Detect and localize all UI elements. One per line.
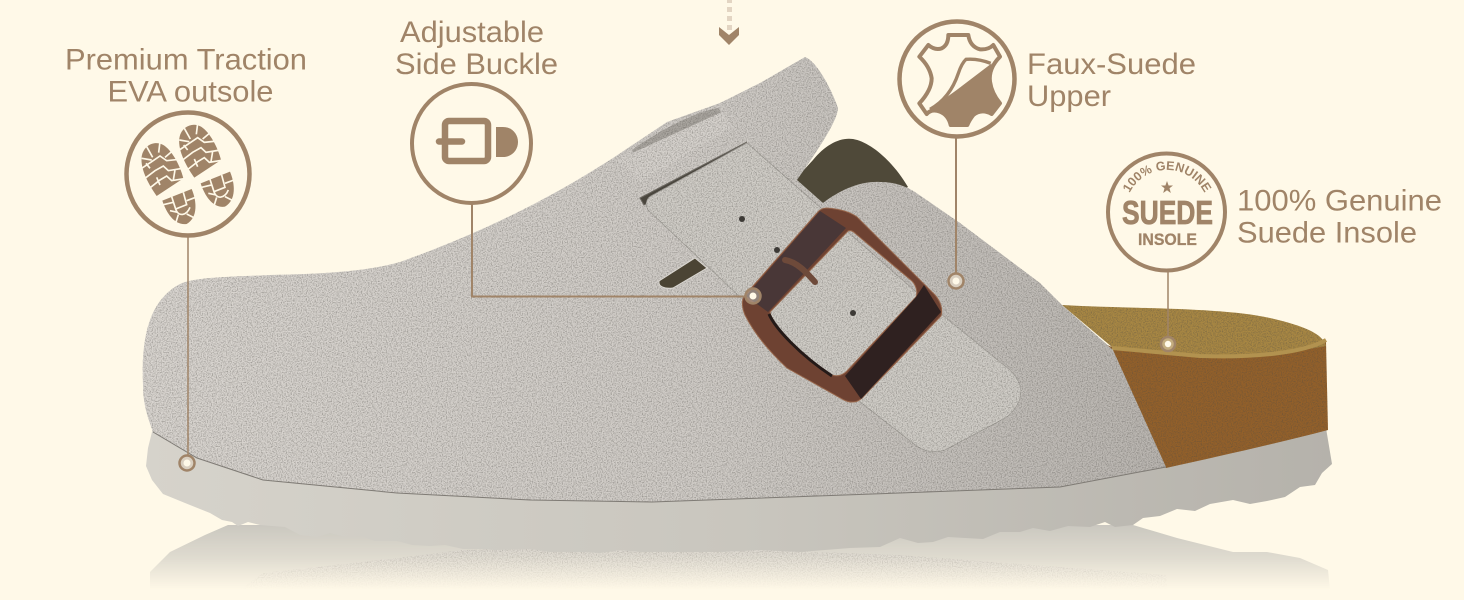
label: buckle: Adjustable: [400, 16, 544, 49]
label: outsole second line: EVA outsole: [108, 76, 274, 108]
shoe interior: [790, 139, 908, 215]
label: upper: Faux-Suede: [1027, 48, 1196, 81]
label: upper second line: Upper: [1027, 80, 1111, 113]
shoe reflection: [150, 525, 1330, 590]
icon: suede badge: INSOLE: [1138, 231, 1197, 249]
callout: upper: [900, 22, 1196, 288]
label: insole second line: Suede Insole: [1237, 216, 1417, 250]
leader line: upper: [955, 137, 957, 274]
label: outsole: Premium Traction: [65, 44, 307, 76]
marker: outsole: [180, 456, 194, 470]
suede upper: [143, 57, 1166, 502]
label: insole: 100% Genuine: [1237, 184, 1442, 218]
icon: suede badge: 100% GENUINE: [1124, 161, 1212, 192]
callout: buckle: [395, 16, 760, 304]
label: buckle second line: Side Buckle: [395, 48, 558, 81]
callout: insole: [1106, 152, 1442, 352]
shoe: [143, 57, 1332, 553]
marker: upper: [948, 274, 964, 288]
callout: outsole: [65, 44, 307, 470]
buckle dark bar right: [845, 285, 941, 399]
buckle dark bar left: [746, 211, 846, 312]
keeper strap: [617, 112, 733, 182]
buckle: [742, 208, 942, 402]
leader line: buckle: [472, 203, 746, 296]
icon: suede badge: SUEDE: [1122, 194, 1213, 231]
strap slit: [640, 142, 747, 205]
marker: buckle: [746, 288, 760, 304]
outsole: [146, 428, 1332, 553]
footbed lip: [1112, 340, 1326, 356]
icon: suede badge: [1106, 152, 1227, 272]
leader line: outsole: [187, 236, 189, 455]
buckle inner shadow: [769, 314, 832, 376]
icon: belt: [412, 84, 531, 203]
top arrow: [719, 0, 739, 45]
icon: footprints: [126, 112, 250, 236]
footbed: [1062, 305, 1326, 355]
strap: [646, 143, 1021, 452]
lower slot: [659, 258, 707, 288]
cork midsole: [1095, 340, 1328, 468]
strap holes: [739, 216, 856, 316]
keeper shadow: [632, 108, 726, 165]
upper seam line: [153, 432, 1166, 502]
buckle prong: [785, 260, 815, 282]
leader line: insole: [1167, 272, 1169, 337]
buckle frame: [742, 208, 942, 402]
icon: leather hide: [900, 22, 1014, 136]
marker: insole: [1161, 337, 1175, 351]
